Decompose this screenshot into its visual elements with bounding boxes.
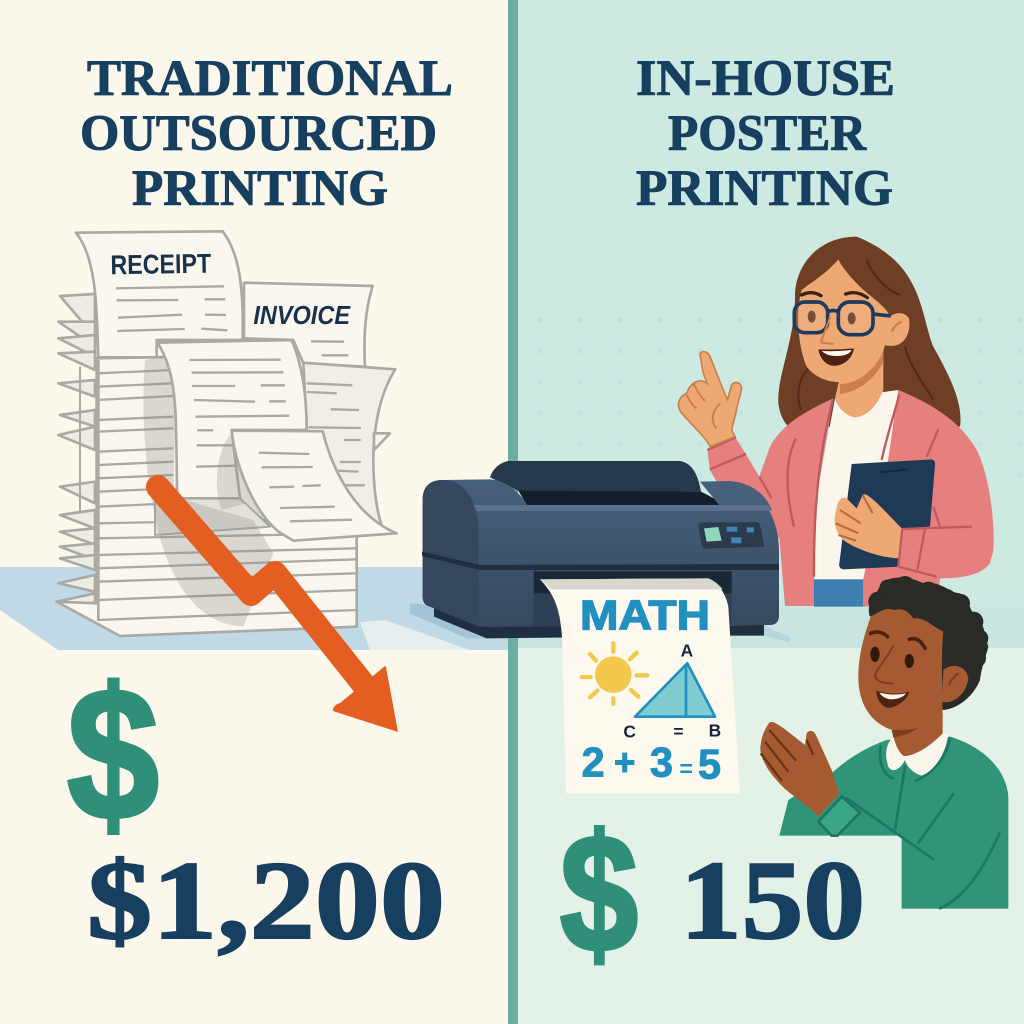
neck [835,350,883,417]
rear paper tray [490,461,701,492]
panel: right background [518,0,1024,1024]
table surface [0,567,508,650]
right cover [700,481,772,510]
poster: math: + [614,742,635,783]
collar [886,733,948,776]
poster: math: = [673,721,683,741]
invoice sheet [244,283,373,367]
raised hand [679,352,742,447]
arrow: orange falling cost [158,487,398,732]
triangle [635,663,715,717]
title: in-house poster printing: POSTER [668,106,867,162]
white shirt [815,390,898,582]
main body [423,479,779,627]
clapping hand [760,722,839,817]
dollar sign right: $ [560,801,638,987]
hair [778,237,961,427]
tablet [839,459,935,569]
cardigan [707,398,833,606]
stack top sheet [155,498,270,535]
curled front sheet [232,431,397,541]
poster: math: B [709,721,721,741]
ear [942,666,968,702]
jeans [814,579,863,607]
neck [892,713,943,756]
face [798,259,909,382]
eyes [808,311,816,323]
poster: math [540,578,740,793]
title: traditional outsourced printing: TRADITIONAL [87,51,453,107]
title: in-house poster printing: IN-HOUSE [636,51,895,107]
mouth [818,348,854,366]
center divider [508,0,518,1024]
eyebrows [802,293,867,298]
illustration: printer [410,461,790,793]
base [434,607,764,638]
poster: math: MATH [580,592,710,639]
printer shadow [410,603,487,638]
sleeve [898,526,991,577]
cuff [818,797,860,836]
holding hand [835,494,902,558]
brows eyes nose [871,632,925,648]
receipt sheet: RECEIPT [110,248,212,280]
mouth [876,691,909,708]
poster: math: A [681,641,694,661]
face [858,609,943,730]
poster: math: 2 [582,740,605,786]
cost: 150: 150 [680,839,865,963]
illustration: boy student [760,576,1008,909]
title: traditional outsourced printing: OUTSOURCED [80,106,437,162]
front sheet shadow [217,433,280,530]
hair [868,576,988,710]
curled middle sheet [157,340,307,498]
poster: math: C [623,721,636,741]
illustration: woman teacher [679,237,994,607]
panel: left background [0,0,508,1024]
title: in-house poster printing [636,51,895,217]
sweater [779,737,1008,909]
curled back sheet [303,363,395,530]
invoice sheet: INVOICE [253,300,351,330]
title: in-house poster printing: PRINTING [636,161,893,217]
poster: math: = [679,756,693,782]
paper shadow [143,353,273,627]
illustration: paper stack with receipt and invoice [57,231,397,636]
poster: math: 3 [650,740,673,786]
big dollar sign left: $ [67,649,159,859]
poster: math: 5 [698,741,721,787]
control panel [698,522,764,549]
receipt sheet [76,231,243,357]
cost: $1,200: $1,200 [87,839,445,963]
title: traditional outsourced printing [80,51,453,217]
sun [582,643,647,704]
glasses [794,302,891,335]
title: traditional outsourced printing: PRINTING [132,161,388,217]
